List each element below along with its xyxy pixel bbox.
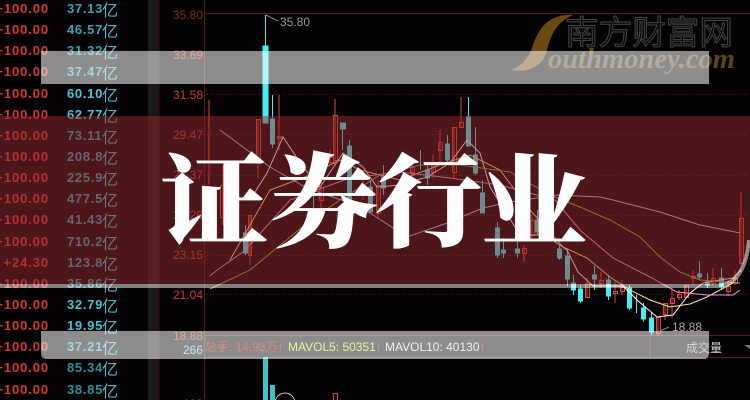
column: price change values: +24.30 [3, 255, 49, 270]
low price marker: 18.88 [672, 320, 702, 334]
price axis labels: 23.15 [173, 248, 203, 262]
price axis labels [173, 8, 203, 400]
moving average lines [210, 130, 741, 317]
candlesticks: falling [244, 15, 724, 335]
column: turnover values: 亿 [102, 314, 118, 338]
volume legend: MAVOL10: 40130↑ [385, 340, 486, 354]
watermark: site name: 南方财富网 [565, 6, 733, 54]
column: turnover values: 亿 [102, 208, 118, 232]
price axis labels: 35.80 [173, 8, 203, 22]
column: turnover values: 亿 [102, 230, 118, 254]
column: turnover values: 亿 [102, 145, 118, 169]
column: turnover values: 208.8 [67, 149, 103, 164]
column: turnover values: 亿 [102, 39, 118, 63]
column: turnover values: 477.5 [67, 191, 103, 206]
column: turnover values: 亿 [102, 18, 118, 42]
candlesticks: rising [209, 95, 744, 336]
price axis labels: 33.69 [173, 48, 203, 62]
column: turnover values: 73.11 [67, 128, 102, 143]
column: turnover values: 60.10 [67, 86, 103, 101]
volume legend: MAVOL5: 50351↑ [288, 340, 382, 354]
price axis labels: 29.47 [173, 128, 203, 142]
volume selector label [686, 339, 750, 356]
price axis labels: 27.37 [173, 168, 203, 182]
volume legend: 总手: 14.93万↑ [205, 340, 284, 354]
high price marker: 35.80 [280, 15, 310, 29]
column: turnover values: 亿 [102, 166, 118, 190]
column: turnover values: 亿 [102, 293, 118, 317]
column: turnover values: 37.21 [67, 339, 103, 354]
column: turnover values: 37.47 [67, 64, 103, 79]
column: turnover values [67, 0, 118, 400]
column: turnover values: 亿 [102, 124, 118, 148]
volume legend [205, 340, 486, 354]
overlay: central red band [0, 116, 750, 284]
price axis labels: 21.04 [173, 288, 203, 302]
chart grid lines [159, 0, 750, 400]
column: turnover values: 亿 [102, 272, 118, 296]
price axis labels: 25.26 [173, 208, 203, 222]
column: turnover values: 62.77 [67, 107, 103, 122]
column: turnover values: 710.2 [67, 234, 103, 249]
column: turnover values: 亿 [102, 60, 118, 84]
volume bars [263, 357, 338, 400]
column: turnover values: 亿 [102, 251, 118, 275]
price axis labels: 266 [183, 343, 203, 357]
column: turnover values: 85.34 [67, 360, 103, 375]
column: turnover values: 亿 [102, 187, 118, 211]
watermark: url: outhmoney.com [548, 43, 735, 75]
overlay: band lower edge [0, 240, 749, 286]
column: turnover values: 123.8 [67, 255, 103, 270]
column: turnover values: 亿 [102, 82, 118, 106]
column: turnover values: 32.79 [67, 297, 103, 312]
overlay: lower grey band [41, 331, 709, 359]
column: turnover values: 46.57 [67, 22, 103, 37]
title: 证券行业 [160, 123, 588, 269]
column: turnover values: 225.9 [67, 170, 103, 185]
column: turnover values: 35.86 [67, 276, 103, 291]
column: turnover values: 37.13 [67, 1, 103, 16]
column: price change values [0, 1, 49, 397]
column: turnover values: 31.32 [67, 43, 103, 58]
column: turnover values: 亿 [102, 103, 118, 127]
column: turnover values: 41.43 [67, 212, 103, 227]
column: turnover values: 38.85 [67, 382, 103, 397]
side divider strip [148, 0, 158, 400]
column: turnover values: 亿 [102, 335, 118, 359]
overlay: upper grey band [41, 51, 709, 84]
column: turnover values: 亿 [102, 356, 118, 380]
price axis labels: 18.88 [173, 329, 203, 343]
volume selector label: 成交量 [686, 339, 722, 356]
column: turnover values: 19.95 [67, 318, 103, 333]
price axis labels: 31.58 [173, 88, 203, 102]
watermark: swoosh logo [511, 15, 573, 71]
high price marker [266, 15, 310, 29]
